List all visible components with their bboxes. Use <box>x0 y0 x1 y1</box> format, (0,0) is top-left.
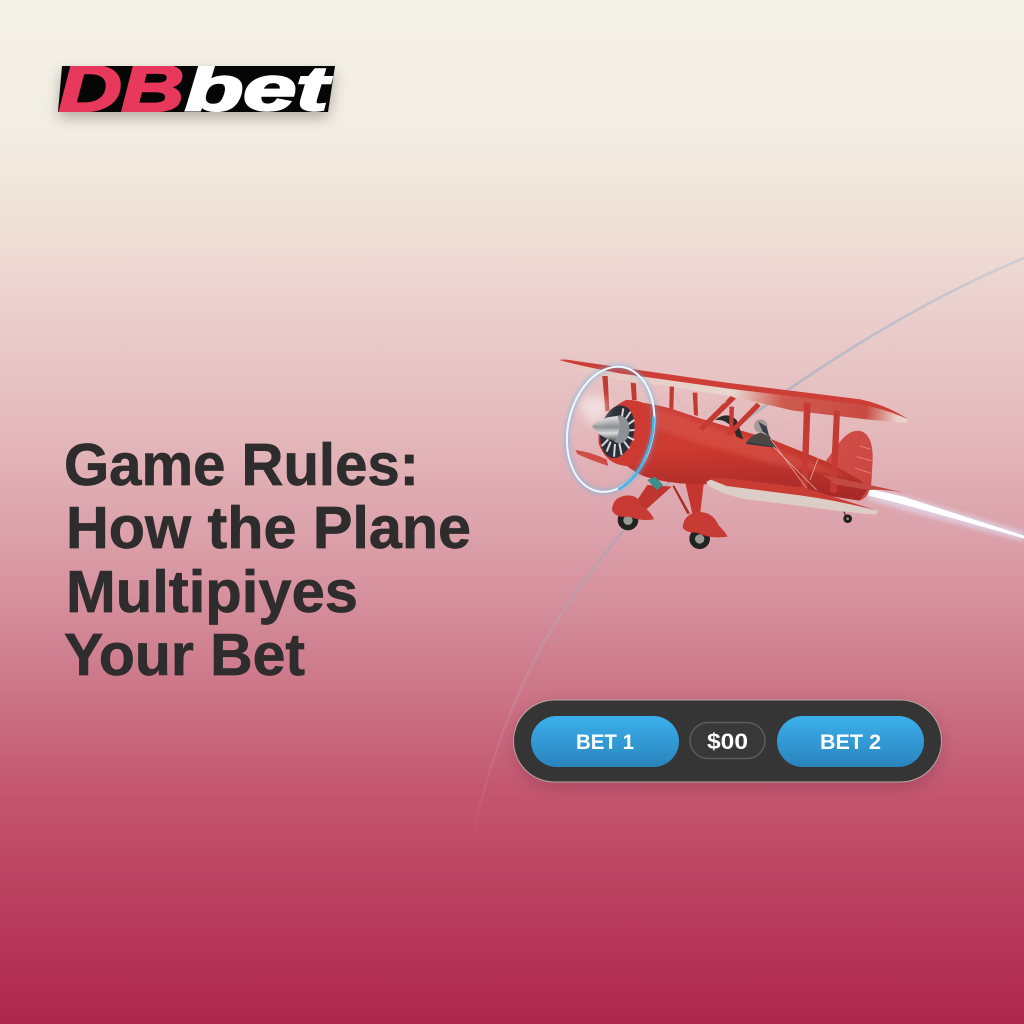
button: BET 1 <box>531 716 679 767</box>
logo: DBbet: DB <box>59 51 184 125</box>
glowing propeller ring <box>556 359 666 500</box>
lower left wing stub <box>575 450 608 466</box>
title: Multipiyes <box>66 559 358 625</box>
propeller blur <box>578 396 608 425</box>
button: BET 1: BET 1 <box>576 731 634 754</box>
amount pill: $00: $00 <box>707 729 748 754</box>
tail fin <box>826 431 873 501</box>
button: BET 2 <box>777 716 924 767</box>
white exhaust trail <box>868 487 1024 542</box>
logo: DBbet: bet <box>185 55 332 124</box>
center struts <box>699 396 840 493</box>
title: Game Rules: <box>64 432 419 498</box>
title: How the Plane <box>66 495 471 561</box>
rigging wires <box>653 393 833 490</box>
logo: DBbet <box>50 64 342 126</box>
propeller hub spinner <box>592 416 620 441</box>
amount pill: $00 <box>690 722 765 758</box>
struts under wing <box>602 376 698 416</box>
bet control bar <box>514 700 942 788</box>
button: BET 2: BET 2 <box>820 731 881 754</box>
cockpit and pilot <box>715 415 777 448</box>
fuselage <box>613 401 868 501</box>
biplane illustration <box>556 359 1024 549</box>
title: Your Bet <box>64 622 305 688</box>
belly detail <box>647 477 663 490</box>
lower wing <box>707 475 905 515</box>
title <box>64 432 471 688</box>
engine cowling <box>595 400 655 466</box>
upper wing <box>559 359 908 423</box>
bar background <box>514 700 942 782</box>
flight path curve <box>468 258 1024 860</box>
landing gear <box>612 482 852 549</box>
